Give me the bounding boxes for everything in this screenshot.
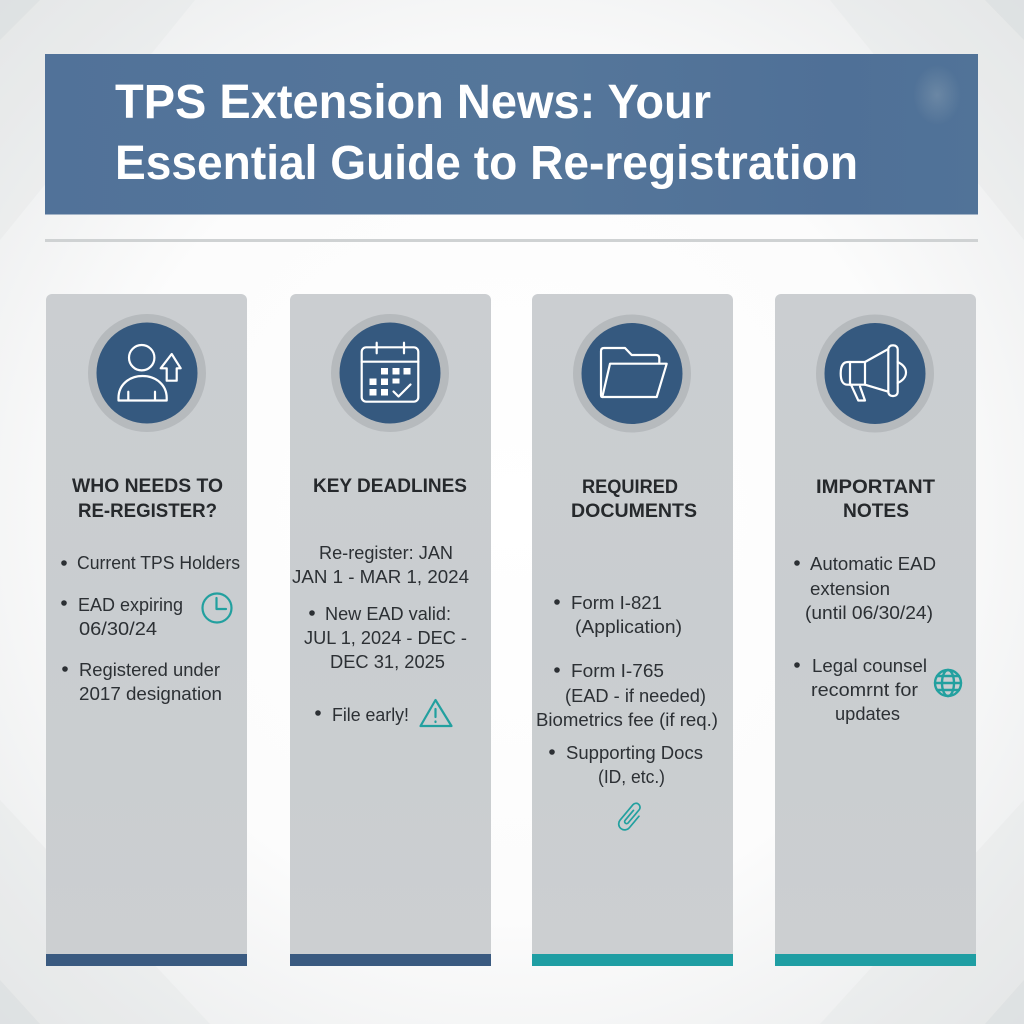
heading: KEY DEADLINES (313, 475, 467, 497)
bullet list: Automatic EAD (810, 554, 936, 574)
bullet list: (ID, etc.) (598, 767, 665, 787)
heading: REQUIRED (582, 476, 678, 498)
icon: megaphone (816, 314, 934, 432)
icon: globe (935, 670, 961, 696)
bullet list: New EAD valid: (325, 604, 451, 624)
icon: paperclip (616, 802, 645, 832)
panel: required documents (532, 294, 733, 966)
panel: key deadlines (290, 294, 491, 966)
icon: folder (573, 314, 691, 432)
bullet list: DEC 31, 2025 (330, 652, 445, 672)
bullet list: extension (810, 579, 890, 599)
bullet list: File early! (332, 705, 409, 725)
bullet list: Form I-821 (571, 593, 662, 613)
heading: DOCUMENTS (571, 500, 697, 522)
bullet list: JUL 1, 2024 - DEC - (304, 628, 467, 648)
bullet list: Form I-765 (571, 661, 664, 681)
bullet list: JAN 1 - MAR 1, 2024 (292, 567, 469, 587)
panel: who needs to re-register (46, 294, 247, 966)
bullet list: (Application) (575, 617, 682, 637)
heading: IMPORTANT (816, 476, 935, 498)
bullet list: 06/30/24 (79, 619, 157, 639)
heading (571, 476, 697, 522)
heading (816, 476, 935, 522)
bullet list (794, 554, 936, 724)
icon: clock (202, 594, 232, 622)
heading: RE-REGISTER? (78, 500, 217, 522)
bullet list: 2017 designation (79, 684, 222, 704)
title banner (45, 54, 978, 214)
heading (72, 475, 223, 522)
bullet list: Biometrics fee (if req.) (536, 710, 718, 730)
heading: NOTES (843, 500, 909, 522)
bullet list: (EAD - if needed) (565, 686, 706, 706)
bullet list (292, 543, 469, 725)
bullet list (61, 553, 240, 704)
heading: WHO NEEDS TO (72, 475, 223, 497)
bullet list (536, 593, 718, 787)
bullet list: (until 06/30/24) (805, 603, 933, 623)
icon: calendar (331, 314, 449, 432)
panel: important notes (775, 294, 976, 966)
title (115, 76, 858, 190)
bullet list: recomrnt for (811, 680, 918, 700)
title: TPS Extension News: Your (115, 76, 711, 129)
bullet list: Supporting Docs (566, 743, 703, 763)
icon: person with up arrow (88, 314, 206, 432)
bullet list: Legal counsel (812, 656, 927, 676)
bullet list: Current TPS Holders (77, 553, 240, 573)
bullet list: Registered under (79, 660, 220, 680)
bullet list: updates (835, 704, 900, 724)
icon: warning triangle (420, 700, 452, 726)
bullet list: EAD expiring (78, 595, 183, 615)
title: Essential Guide to Re-registration (115, 137, 858, 190)
bullet list: Re-register: JAN (319, 543, 453, 563)
